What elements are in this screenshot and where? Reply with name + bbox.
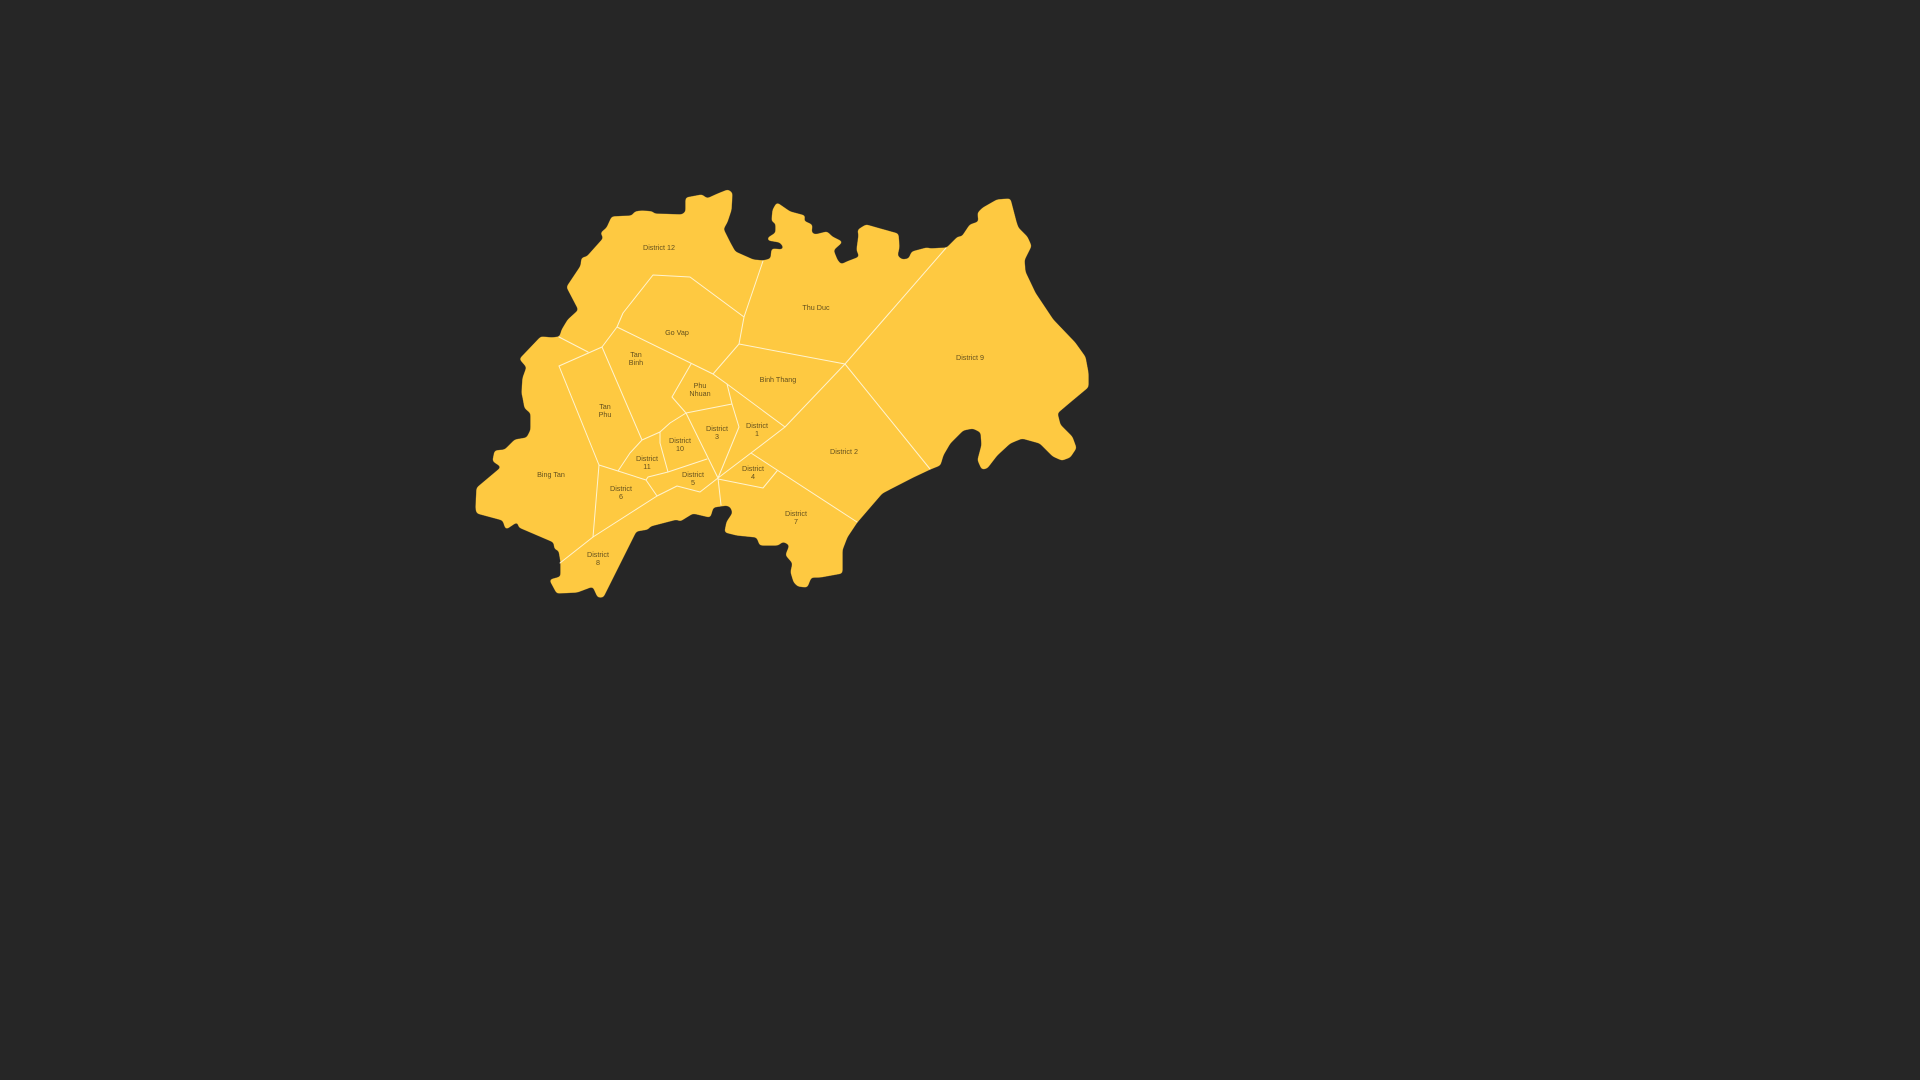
label: District 11: District xyxy=(636,454,658,463)
label: Tan Phu: Tan xyxy=(599,402,611,411)
label: District 6: District xyxy=(610,484,632,493)
label: District 9: District 9 xyxy=(956,353,984,362)
label: District 11: 11 xyxy=(643,462,651,471)
label: District 3: 3 xyxy=(715,432,719,441)
label: District 10: District xyxy=(669,436,691,445)
label: District 8: District xyxy=(587,550,609,559)
label: District 1: 1 xyxy=(755,429,759,438)
label: District 2: District 2 xyxy=(830,447,858,456)
label: Phu Nhuan: Nhuan xyxy=(689,389,711,398)
district boundaries xyxy=(559,248,946,563)
map silhouette xyxy=(476,190,1088,597)
label: District 6: 6 xyxy=(619,492,623,501)
label: Bing Tan: Bing Tan xyxy=(537,470,565,479)
label: Binh Thang: Binh Thang xyxy=(760,375,796,384)
label: District 12: District 12 xyxy=(643,243,675,252)
label: District 7: District xyxy=(785,509,807,518)
label: District 5: District xyxy=(682,470,704,479)
label: District 4: District xyxy=(742,464,764,473)
label: Phu Nhuan: Phu xyxy=(694,381,706,390)
label: District 1: District xyxy=(746,421,768,430)
label: District 10: 10 xyxy=(676,444,684,453)
label: Tan Phu: Phu xyxy=(599,410,611,419)
label: Tan Binh: Tan xyxy=(630,350,642,359)
label: Go Vap: Go Vap xyxy=(665,328,689,337)
label: District 4: 4 xyxy=(751,472,755,481)
label: District 5: 5 xyxy=(691,478,695,487)
label: District 7: 7 xyxy=(794,517,798,526)
label: District 8: 8 xyxy=(596,558,600,567)
label: District 3: District xyxy=(706,424,728,433)
label: Thu Duc: Thu Duc xyxy=(802,303,830,312)
label: Tan Binh: Binh xyxy=(629,358,643,367)
